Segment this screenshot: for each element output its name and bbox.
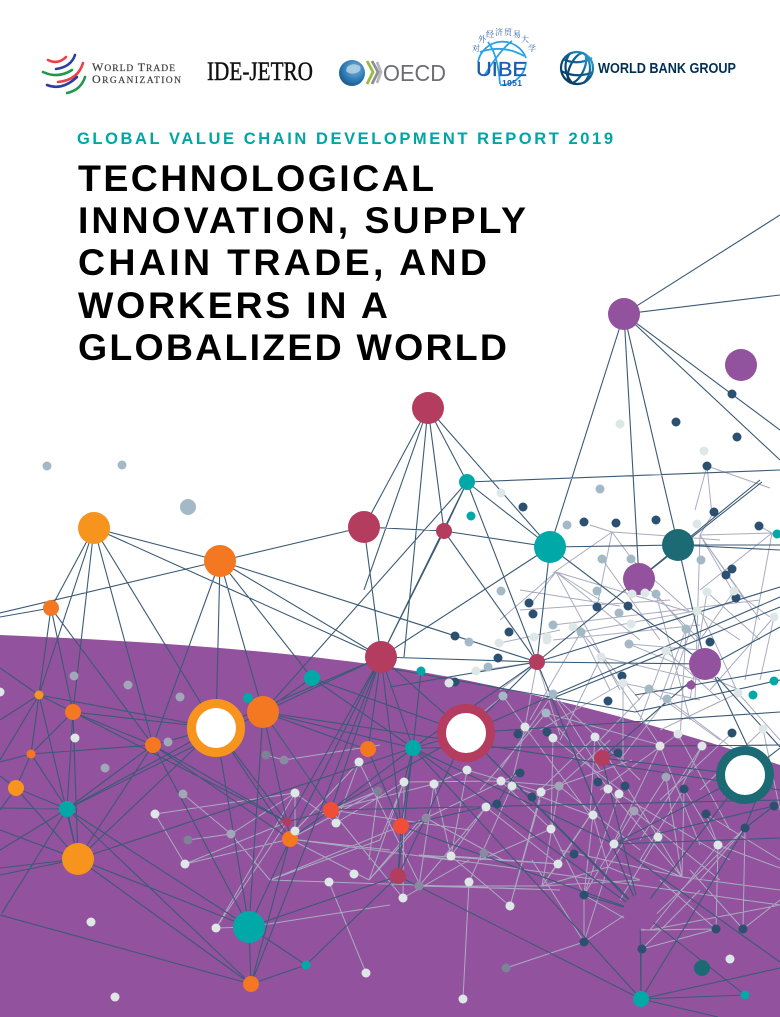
small coloured nodes xyxy=(26,512,780,1000)
logo: World Trade Organization xyxy=(43,55,181,93)
light blue dots xyxy=(42,460,706,718)
UIBE calligraphy: 易 xyxy=(513,29,521,40)
icon: World Bank globe xyxy=(561,51,593,85)
navy dots xyxy=(450,390,778,954)
logo: IDE-JETRO: IDE-JETRO xyxy=(207,57,313,86)
logo: OECD xyxy=(339,60,446,86)
hidden purple node xyxy=(623,895,657,929)
UIBE year: 1951 xyxy=(502,78,522,88)
pale dots xyxy=(0,420,778,1004)
main title: GLOBALIZED WORLD xyxy=(78,326,507,368)
panel: purple wave background xyxy=(0,635,780,1017)
main title: WORKERS IN A xyxy=(78,284,388,326)
medium nodes xyxy=(8,474,710,1007)
UIBE calligraphy: 经 xyxy=(486,29,494,40)
main title: TECHNOLOGICAL xyxy=(78,157,434,199)
logo: UIBE xyxy=(472,27,536,88)
icon: WTO arcs xyxy=(43,55,85,93)
grey dots xyxy=(70,672,670,972)
OECD wordmark: OECD xyxy=(383,60,446,86)
UIBE wordmark: UIBE xyxy=(476,59,527,81)
main title xyxy=(78,157,526,368)
WTO wordmark: ORGANIZATION xyxy=(92,72,181,86)
report series heading: GLOBAL VALUE CHAIN DEVELOPMENT REPORT 2019 xyxy=(77,130,613,148)
icon: OECD globe xyxy=(339,60,365,86)
UIBE calligraphy: 学 xyxy=(528,43,536,54)
icon: UIBE globe xyxy=(478,41,526,85)
main title: CHAIN TRADE, AND xyxy=(78,241,487,283)
network chart xyxy=(0,215,780,1017)
ring nodes xyxy=(192,704,770,800)
large nodes xyxy=(62,298,757,943)
main title: INNOVATION, SUPPLY xyxy=(78,199,526,241)
dark network lines xyxy=(0,215,780,1017)
WTO wordmark xyxy=(92,60,181,86)
light network lines xyxy=(155,466,780,999)
WTO wordmark: WORLD TRADE xyxy=(92,60,175,74)
UIBE calligraphy: 济 xyxy=(495,27,503,38)
UIBE calligraphy: 对 xyxy=(472,43,480,54)
UIBE calligraphy: 大 xyxy=(521,34,529,45)
icon: OECD chevrons xyxy=(367,61,381,84)
UIBE calligraphy: 贸 xyxy=(504,27,513,38)
World Bank wordmark: WORLD BANK GROUP xyxy=(598,61,736,77)
UIBE calligraphy: 外 xyxy=(478,34,487,45)
logo: World Bank Group xyxy=(561,51,736,85)
